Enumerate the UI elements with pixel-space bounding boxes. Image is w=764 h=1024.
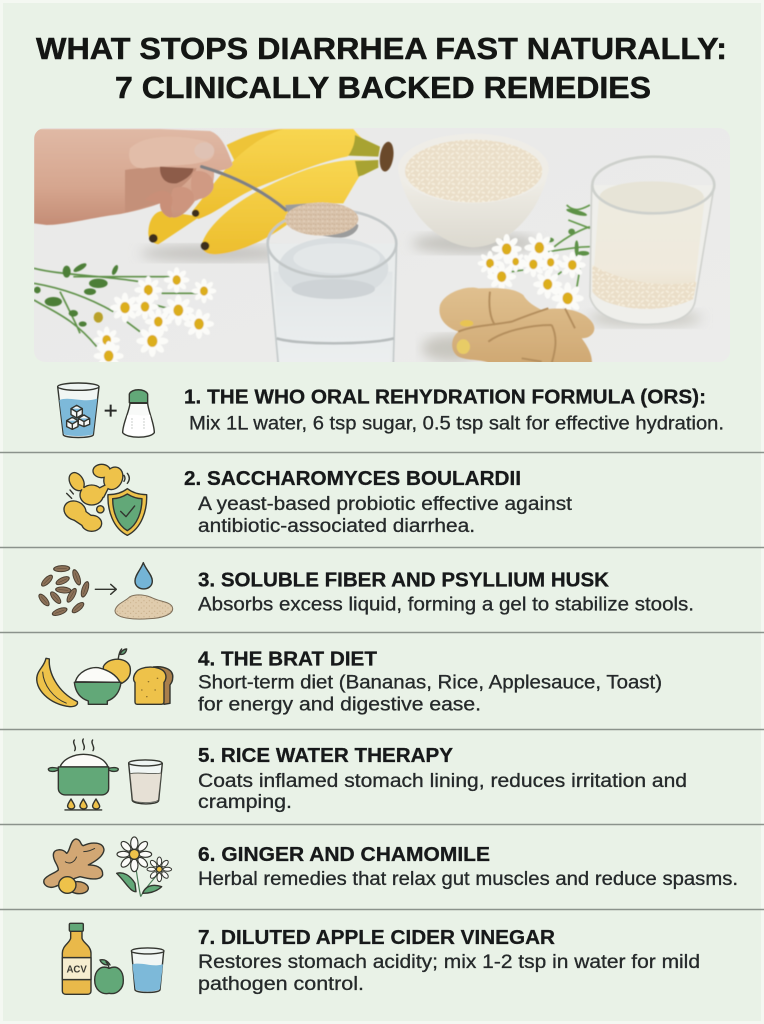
photo: milky rice water glass [588, 157, 714, 327]
photo: right chamomile [478, 205, 590, 314]
icon: yeast and shield [62, 465, 147, 535]
row 4: BRAT [37, 648, 662, 716]
description 7: pathogen control. [198, 974, 364, 995]
icon: rice pot on burner and glass [48, 739, 162, 810]
row 2: Saccharomyces [62, 465, 573, 537]
heading 1: 1. THE WHO ORAL REHYDRATION FORMULA (ORS): [184, 386, 706, 408]
row 5: Rice water [48, 739, 687, 813]
icon: vinegar bottle, apple and glass: ACV [66, 965, 87, 976]
icon: water glass plus salt shaker [58, 383, 154, 437]
description 6: Herbal remedies that relax gut muscles and reduce spasms. [198, 869, 738, 890]
heading 5: 5. RICE WATER THERAPY [198, 744, 453, 767]
description 7: Restores stomach acidity; mix 1-2 tsp in water for mild [198, 952, 700, 973]
description 4 [198, 672, 662, 716]
photo: ginger root [422, 287, 594, 365]
row 1: ORS [58, 383, 724, 437]
hero photo of remedies [34, 128, 730, 371]
description 3: Absorbs excess liquid, forming a gel to stabilize stools. [198, 594, 694, 616]
description 5: Coats inflamed stomach lining, reduces irritation and [198, 771, 687, 792]
photo: hand and spoon [34, 129, 233, 225]
photo: bowl of rice [404, 139, 542, 256]
right half of the photo [398, 134, 714, 365]
icon: ginger and chamomile [44, 837, 172, 897]
photo: water glass [267, 210, 397, 365]
heading 6: 6. GINGER AND CHAMOMILE [198, 843, 490, 866]
description 2: antibiotic-associated diarrhea. [198, 516, 475, 537]
title: WHAT STOPS DIARRHEA FAST NATURALLY: [36, 31, 727, 66]
photo: left chamomile [34, 262, 216, 371]
title: 7 CLINICALLY BACKED REMEDIES [115, 70, 651, 105]
title [36, 31, 727, 105]
description 5 [198, 771, 687, 813]
left half of the photo [34, 129, 397, 371]
row dividers [0, 452, 764, 910]
row 3: Fiber [37, 563, 694, 619]
icon: psyllium seeds, arrow, drop and gel [37, 563, 173, 619]
heading 7: 7. DILUTED APPLE CIDER VINEGAR [198, 926, 555, 949]
description 7 [198, 952, 700, 995]
icon: banana, rice bowl, apple, toast [37, 649, 173, 707]
row 6: Ginger and chamomile [44, 837, 738, 897]
row 7: ACV [62, 923, 700, 995]
description 1: Mix 1L water, 6 tsp sugar, 0.5 tsp salt for effective hydration. [189, 414, 724, 434]
description 2 [198, 494, 573, 537]
icon: vinegar bottle, apple and glass [62, 923, 164, 994]
photo: bananas [140, 129, 395, 262]
heading 2: 2. SACCHAROMYCES BOULARDII [184, 467, 521, 490]
photo: spoon with psyllium [202, 167, 358, 238]
description 5: cramping. [198, 792, 292, 813]
heading 3: 3. SOLUBLE FIBER AND PSYLLIUM HUSK [198, 568, 609, 592]
description 2: A yeast-based probiotic effective against [198, 494, 573, 515]
description 4: for energy and digestive ease. [198, 694, 481, 716]
description 4: Short-term diet (Bananas, Rice, Applesauce, Toast) [198, 672, 662, 694]
heading 4: 4. THE BRAT DIET [198, 648, 377, 670]
